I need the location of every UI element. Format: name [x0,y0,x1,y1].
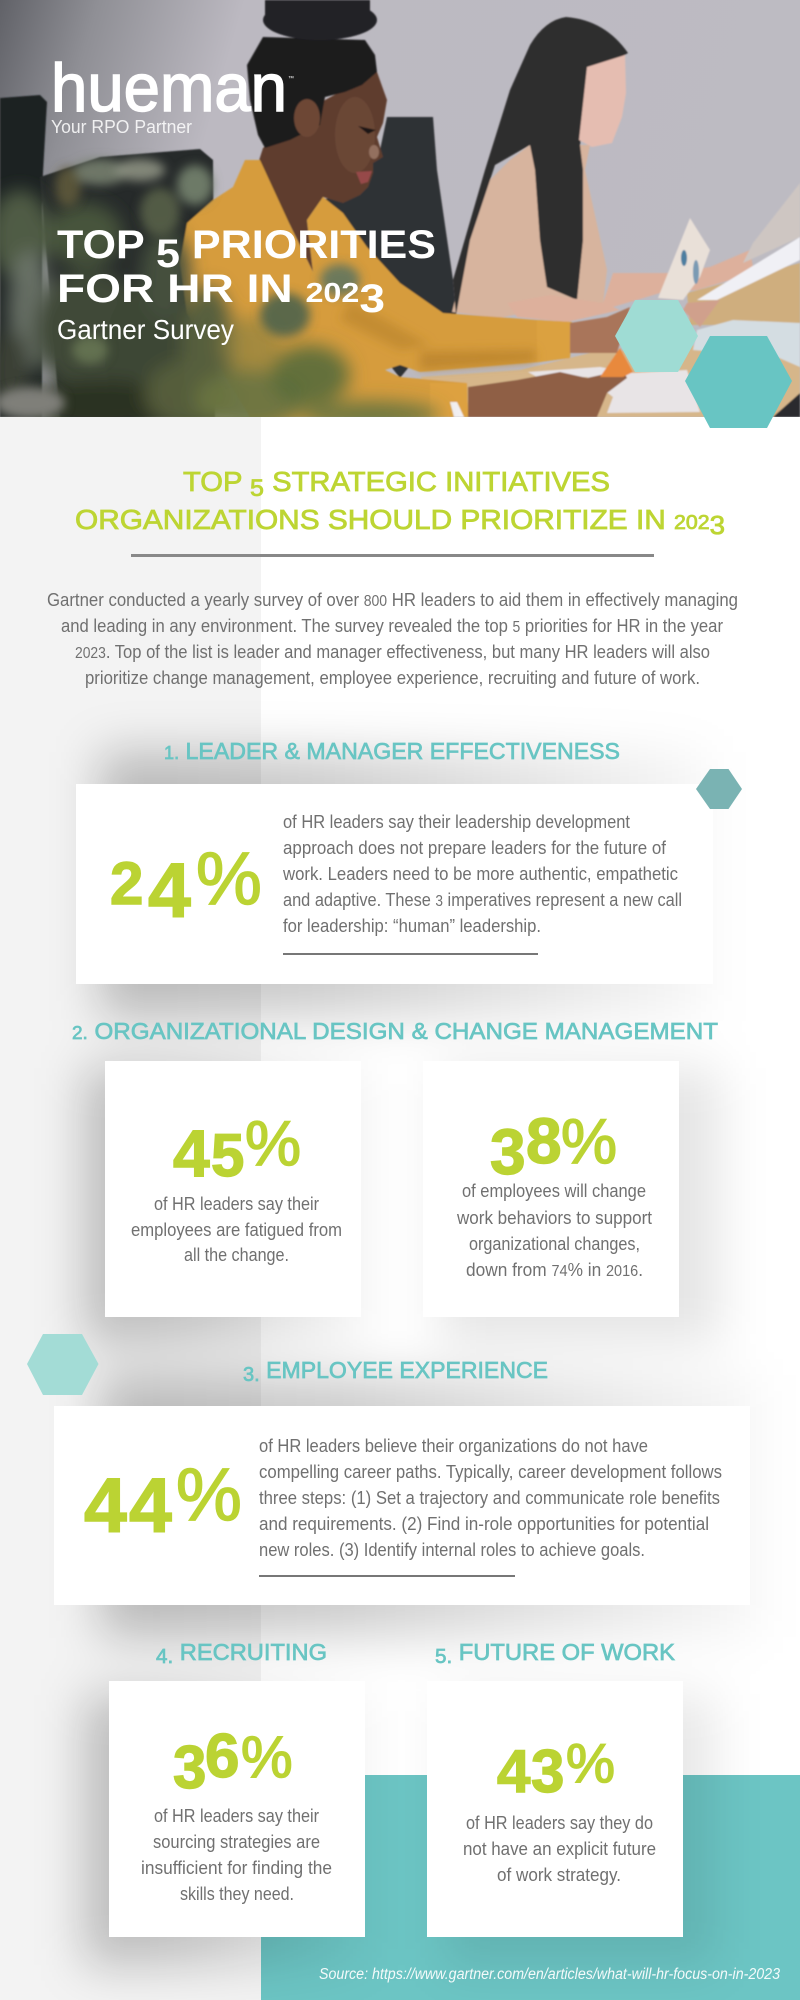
description [141,1805,332,1904]
panel: 45% card [105,1061,361,1317]
intro paragraph: Gartner conducted a yearly survey of over 800 HR leaders to aid them in effectively managing [47,589,738,610]
stat: 44%: 4 [84,1463,127,1549]
stat: 44%: 4 [129,1463,172,1549]
logo: ™ [288,75,294,82]
section 3 heading: 3. [243,1364,260,1386]
panel: leader and manager effectiveness [76,784,713,984]
description: of HR leaders say their [154,1193,319,1214]
stat: 24%: % [196,837,262,920]
section heading: 3 [710,510,725,540]
stat: 36%: % [241,1725,293,1790]
description: insufficient for finding the [141,1857,332,1878]
description [463,1812,656,1885]
heading divider [131,554,654,557]
intro paragraph: and leading in any environment. The survey revealed the top 5 priorities for HR in the year [61,615,723,636]
logo: hueman [51,50,287,126]
hexagon: light teal [615,300,698,372]
description: new roles. (3) Identify internal roles to achieve goals. [259,1539,645,1560]
description: down from 74% in 2016. [466,1259,643,1280]
description [259,1435,722,1560]
section heading: STRATEGIC INITIATIVES [264,466,610,497]
hero title [57,223,436,321]
section 2 heading: 2. ORGANIZATIONAL DESIGN & CHANGE MANAGEMENT [72,1018,718,1044]
description: compelling career paths. Typically, career development follows [259,1461,722,1482]
section 5 heading: 5. [435,1646,452,1668]
blurred foliage foreground [0,159,440,430]
card shadows [85,752,760,1965]
description [282,811,682,936]
intro paragraph [47,589,738,688]
description: of HR leaders say they do [466,1812,653,1833]
stat: 43%: % [566,1732,615,1794]
section 4 heading: RECRUITING [173,1639,327,1665]
panel: employee experience [54,1406,750,1605]
stat: 43%: 4 [497,1738,531,1805]
stat: 24%: 2 [110,850,143,917]
stat: 38%: 8 [526,1105,562,1177]
stat: 44%: % [176,1453,242,1536]
stat: 45%: 5 [211,1122,244,1189]
section 5 heading: FUTURE OF WORK [452,1639,676,1665]
section 3 heading: EMPLOYEE EXPERIENCE [260,1357,548,1383]
stat: 45%: 4 [173,1116,210,1190]
stat: 38%: 3 [490,1116,526,1188]
hero title: PRIORITIES [180,223,436,267]
description: of employees will change [462,1180,646,1201]
description: of HR leaders say their leadership development [283,811,630,832]
description: all the change. [184,1244,289,1265]
hero photo [0,0,800,430]
stat: 36%: 3 [173,1734,206,1801]
description: employees are fatigued from [131,1219,342,1240]
description: of HR leaders believe their organizations do not have [259,1435,648,1456]
description [131,1193,342,1265]
stat: 24%: 4 [148,848,191,934]
hero title: FOR HR IN 202 [57,267,352,311]
table and documents [420,263,800,417]
stat: 43%: 3 [531,1738,564,1805]
first woman [180,0,633,417]
intro paragraph: prioritize change management, employee experience, recruiting and future of work. [85,667,700,688]
panel: future of work [427,1681,683,1937]
logo: Your RPO Partner [51,117,192,137]
description: for leadership: “human” leadership. [283,915,541,936]
hero title: TOP [57,223,138,267]
far chair, left chair, middle chair [0,95,456,417]
description: skills they need. [180,1883,294,1904]
hero title: 5 [156,232,180,276]
description: and requirements. (2) Find in-role opportunities for potential [259,1513,709,1534]
hexagon: small teal [696,769,742,809]
underline [259,1575,515,1577]
underline [283,953,538,955]
description: sourcing strategies are [153,1831,320,1852]
hero subtitle: Gartner Survey [57,314,234,345]
hero title: 3 [359,277,385,321]
stat: 38%: % [561,1107,617,1177]
description: of HR leaders say their [154,1805,319,1826]
section heading: 5 [250,475,264,502]
panel: 38% card [423,1061,679,1317]
second woman [452,17,800,327]
description: and adaptive. These 3 imperatives represent a new call [283,889,682,910]
hexagon: teal [685,336,792,428]
description: not have an explicit future [463,1838,656,1859]
description: organizational changes, [469,1233,640,1254]
description [456,1180,652,1280]
stat: 36%: 6 [205,1722,239,1791]
section 4 heading: 4. [156,1646,173,1668]
section heading: TOP [183,466,240,497]
description: approach does not prepare leaders for the future of [283,837,667,858]
description: of work strategy. [497,1864,621,1885]
hexagon: left light teal [27,1334,98,1395]
section heading [75,466,725,540]
description: work. Leaders need to be more authentic, empathetic [282,863,678,884]
panel: recruiting [109,1681,365,1937]
section 1 heading: 1. LEADER & MANAGER EFFECTIVENESS [164,738,620,764]
stat: 45%: % [245,1109,301,1179]
description: three steps: (1) Set a trajectory and communicate role benefits [259,1487,720,1508]
intro paragraph: 2023. Top of the list is leader and manager effectiveness, but many HR leaders will also [75,641,710,662]
blurred shirt shading [340,300,535,370]
description: work behaviors to support [456,1207,652,1228]
section heading: ORGANIZATIONS SHOULD PRIORITIZE IN 202 [75,504,707,535]
